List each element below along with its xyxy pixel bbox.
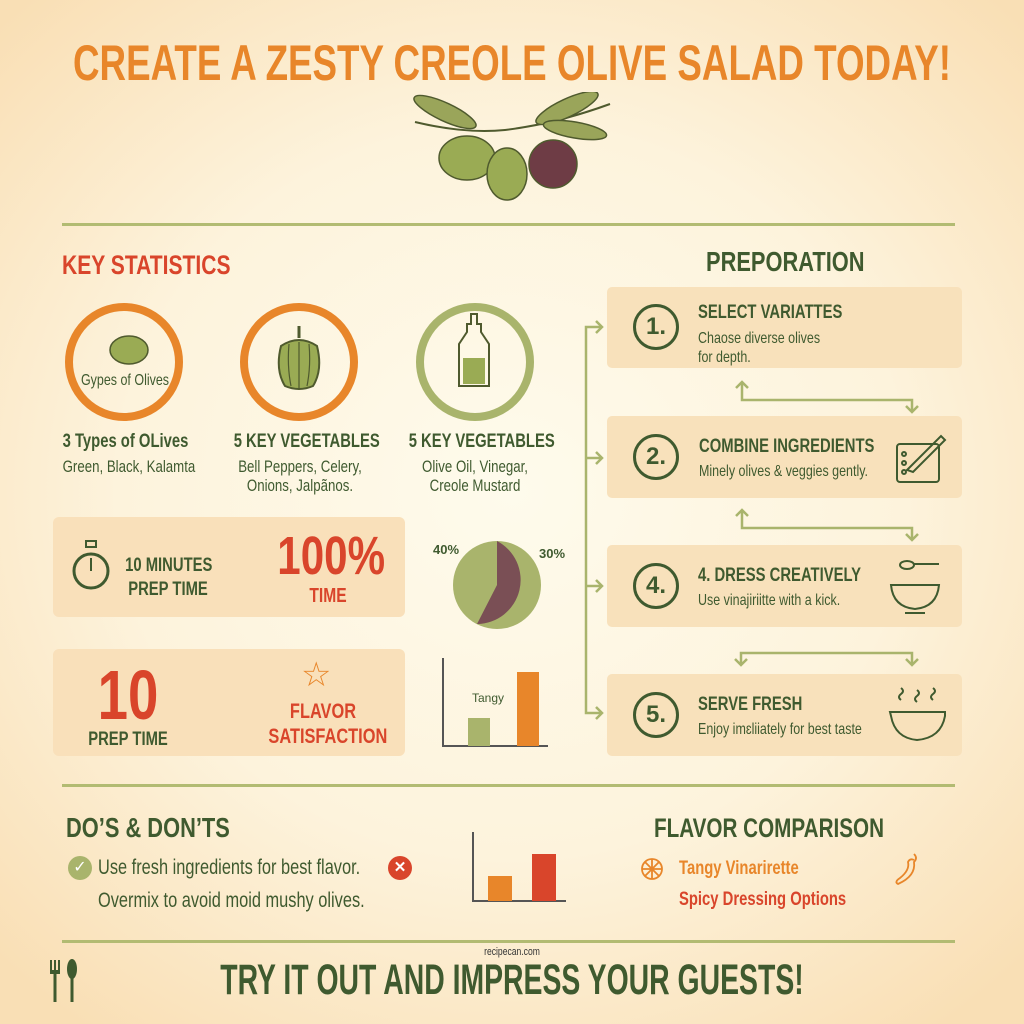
step 5 [607, 674, 962, 756]
stat: dressing [409, 303, 555, 495]
panel: flavor satisfaction: 10 [98, 656, 158, 734]
panel: prep time [53, 517, 405, 617]
panel: flavor satisfaction: PREP TIME [88, 729, 168, 750]
stat: olives: 3 Types of OLives [63, 431, 188, 452]
step 5: 5. [646, 701, 666, 728]
footer tagline: TRY IT OUT AND IMPRESS YOUR GUESTS! [220, 956, 804, 1004]
list: dos and donts [68, 856, 412, 912]
heading: key statistics: KEY STATISTICS [62, 250, 231, 280]
panel: flavor satisfaction [53, 649, 405, 756]
heading: dos & donts: DO’S & DON’TS [66, 812, 230, 843]
chart: pie: 30% [539, 546, 565, 561]
legend: flavor comparison [641, 853, 917, 910]
step 4 [607, 545, 962, 627]
icon: olive branch [413, 92, 610, 201]
stat: vegetables [234, 303, 380, 495]
step 2 [607, 416, 962, 498]
step 1: Chaose diverse olives [698, 330, 820, 347]
stat: vegetables: 5 KEY VEGETABLES [234, 431, 380, 452]
heading: preparation: PREPORATION [706, 246, 865, 277]
step 4: 4. DRESS CREATIVELY [698, 565, 861, 586]
stat: vegetables: Onions, Jalpãnos. [247, 476, 353, 495]
step 4: Use vinajiriitte with a kick. [698, 592, 840, 609]
step 2: Minely olives & veggies gently. [699, 463, 868, 480]
step 1: for depth. [698, 349, 751, 366]
source text: recipecan.com [484, 946, 540, 958]
panel: prep time: 100% [277, 526, 385, 586]
stat: olives: Gypes of Olives [81, 372, 169, 389]
arrows: flow [584, 320, 919, 720]
icon: fork and spoon [50, 959, 77, 1002]
list: dos and donts: ✓ [73, 859, 87, 876]
panel: flavor satisfaction: FLAVOR [290, 700, 356, 723]
panel: prep time: PREP TIME [128, 579, 208, 600]
legend: flavor comparison: Tangy Vinarirette [679, 858, 799, 879]
step 1: 1. [646, 313, 666, 340]
chart: bars tangy [442, 658, 548, 747]
step 1: SELECT VARIATTES [698, 302, 842, 323]
stat: dressing: Olive Oil, Vinegar, [422, 457, 528, 476]
stat: dressing: Creole Mustard [430, 476, 520, 495]
stat: vegetables: Bell Peppers, Celery, [238, 457, 362, 476]
list: dos and donts: Use fresh ingredients for best flavor. [98, 856, 360, 879]
icon: steaming bowl [888, 687, 946, 741]
title: CREATE A ZESTY CREOLE OLIVE SALAD TODAY! [73, 35, 951, 91]
icon: stopwatch [72, 540, 110, 590]
panel: flavor satisfaction: ☆ [301, 656, 331, 694]
stat: dressing: 5 KEY VEGETABLES [409, 431, 555, 452]
chart: bars [472, 832, 566, 902]
panel: prep time: 10 MINUTES [125, 555, 212, 576]
chart: pie: 40% [433, 542, 459, 557]
chart: pie [433, 541, 565, 629]
panel: flavor satisfaction: SATISFACTION [268, 725, 387, 748]
chart: bars tangy: Tangy [472, 691, 504, 705]
stat: olives [63, 303, 196, 476]
icon: bowl spoon [890, 560, 940, 614]
stat: olives: Green, Black, Kalamta [63, 457, 195, 476]
panel: prep time: TIME [309, 585, 347, 607]
step 2: COMBINE INGREDIENTS [699, 436, 874, 457]
list: dos and donts: Overmix to avoid moid mushy olives. [98, 889, 365, 912]
icon: knife board [896, 434, 946, 483]
step 5: SERVE FRESH [698, 694, 802, 715]
list: dos and donts: ✕ [394, 859, 406, 876]
step 1 [607, 287, 962, 368]
heading: flavor comparison: FLAVOR COMPARISON [654, 813, 884, 843]
step 4: 4. [646, 572, 666, 599]
step 2: 2. [646, 443, 666, 470]
step 5: Enjoy imɛliiately for best taste [698, 721, 862, 738]
legend: flavor comparison: Spicy Dressing Options [679, 889, 846, 910]
